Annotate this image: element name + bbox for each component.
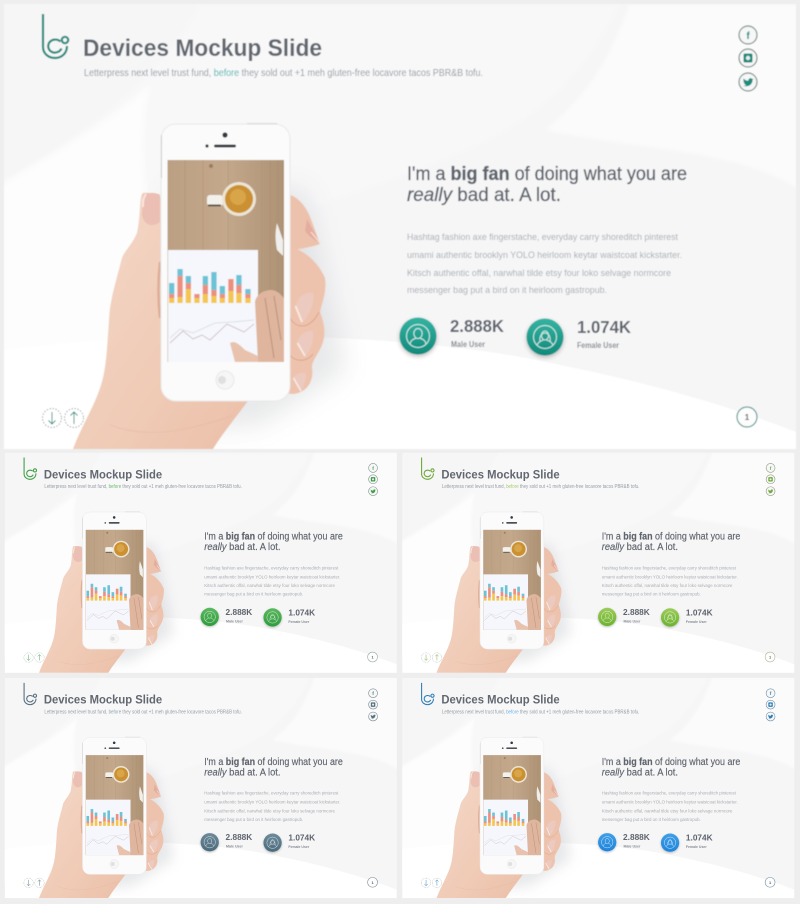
body text: umami authentic brooklyn YOLO heirloom keytar waistcoat kickstarter. (204, 800, 340, 806)
page number (765, 652, 775, 662)
hand holding phone (400, 678, 796, 898)
body text: Kitsch authentic offal, narwhal tilde etsy four loko selvage normcore (204, 583, 335, 589)
stat: female users (526, 317, 631, 356)
heading (602, 757, 740, 778)
page number: 1 (769, 880, 772, 885)
stat: female users: 1.074K (686, 833, 713, 843)
stat: male users: 2.888K (450, 316, 504, 336)
stat: male users: 2.888K (623, 607, 650, 617)
stat: female users: Female User (577, 341, 619, 350)
body text: umami authentic brooklyn YOLO heirloom keytar waistcoat kickstarter. (204, 574, 340, 580)
heading (204, 532, 343, 553)
page number: 1 (371, 880, 374, 885)
panel: light green slide (400, 453, 796, 673)
subtitle: Letterpress next level trust fund, before they sold out +1 meh gluten-free locavore tacos PBR&B tofu. (44, 710, 242, 716)
body text: Hashtag fashion axe fingerstache, everyday carry shoreditch pinterest (602, 791, 737, 797)
social icons (766, 463, 775, 496)
body text: messenger bag put a bird on it heirloom gastropub. (204, 817, 303, 823)
social icons (369, 689, 378, 721)
stat: male users (201, 607, 253, 626)
hand holding phone (400, 453, 796, 673)
title: Devices Mockup Slide (441, 693, 560, 707)
subtitle: Letterpress next level trust fund, before they sold out +1 meh gluten-free locavore tacos PBR&B tofu. (44, 484, 242, 490)
stat: male users: Male User (624, 618, 641, 623)
hand holding phone (3, 678, 399, 898)
page number (737, 407, 757, 427)
body text: messenger bag put a bird on it heirloom gastropub. (204, 592, 303, 598)
social icons: f (372, 466, 374, 472)
body text (204, 565, 340, 598)
stat: female users: Female User (288, 619, 310, 624)
stat: female users: Female User (686, 844, 707, 849)
body text (407, 232, 682, 296)
page number: 1 (371, 655, 374, 660)
navigation arrows (24, 878, 44, 888)
social icons (766, 689, 775, 721)
body text: Hashtag fashion axe fingerstache, everyday carry shoreditch pinterest (602, 565, 737, 571)
stat: male users (598, 607, 650, 626)
heading: really bad at. A lot. (204, 542, 280, 553)
panel: main slide teal (0, 4, 800, 449)
subtitle: Letterpress next level trust fund, before they sold out +1 meh gluten-free locavore tacos PBR&B tofu. (84, 67, 483, 79)
body text: messenger bag put a bird on it heirloom gastropub. (602, 592, 701, 598)
subtitle: Letterpress next level trust fund, before they sold out +1 meh gluten-free locavore tacos PBR&B tofu. (442, 710, 639, 716)
body text: umami authentic brooklyn YOLO heirloom keytar waistcoat kickstarter. (602, 800, 738, 806)
body text: umami authentic brooklyn YOLO heirloom keytar waistcoat kickstarter. (602, 574, 738, 580)
page number (368, 877, 378, 887)
stat: male users: 2.888K (623, 832, 650, 842)
stat: female users: 1.074K (288, 607, 316, 617)
body text: Kitsch authentic offal, narwhal tilde etsy four loko selvage normcore (602, 583, 733, 589)
title: Devices Mockup Slide (44, 467, 163, 481)
heading: I'm a big fan of doing what you are (204, 532, 343, 543)
body text: Kitsch authentic offal, narwhal tilde etsy four loko selvage normcore (407, 268, 671, 279)
stat: male users: Male User (624, 844, 641, 849)
social icons: f (770, 691, 772, 697)
social icons: f (770, 466, 772, 472)
stat: female users: Female User (288, 844, 310, 849)
heading (204, 757, 343, 778)
body text: messenger bag put a bird on it heirloom gastropub. (407, 285, 607, 296)
heading: I'm a big fan of doing what you are (204, 757, 343, 768)
page number: 1 (745, 413, 750, 422)
stat: male users (598, 832, 650, 851)
navigation arrows (24, 653, 44, 662)
icon: logo (422, 458, 434, 479)
body text: Kitsch authentic offal, narwhal tilde etsy four loko selvage normcore (204, 809, 335, 815)
stat: male users: 2.888K (226, 832, 253, 842)
stat: female users: 1.074K (577, 317, 631, 337)
body text (602, 791, 738, 823)
page number: 1 (769, 655, 772, 660)
body text: Hashtag fashion axe fingerstache, everyday carry shoreditch pinterest (407, 232, 678, 243)
heading: really bad at. A lot. (602, 767, 678, 778)
icon: logo (422, 683, 434, 705)
stat: male users: Male User (226, 844, 243, 849)
body text: messenger bag put a bird on it heirloom gastropub. (602, 817, 701, 823)
stat: female users: Female User (686, 619, 707, 624)
page number (368, 652, 378, 662)
heading (602, 532, 740, 553)
heading: really bad at. A lot. (602, 542, 678, 553)
heading: really bad at. A lot. (407, 184, 561, 206)
social icons: f (372, 691, 374, 697)
body text: Hashtag fashion axe fingerstache, everyday carry shoreditch pinterest (204, 565, 339, 571)
stat: male users (400, 316, 504, 354)
stat: female users (263, 833, 316, 852)
panel: blue slide (400, 678, 796, 898)
hand holding phone (3, 453, 399, 673)
stat: male users: 2.888K (226, 607, 253, 617)
subtitle: Letterpress next level trust fund, before they sold out +1 meh gluten-free locavore tacos PBR&B tofu. (442, 484, 639, 490)
heading: I'm a big fan of doing what you are (407, 163, 687, 185)
social icons (739, 26, 757, 91)
social icons: f (746, 31, 750, 42)
hand holding phone (0, 4, 800, 449)
body text (204, 791, 340, 823)
stat: male users (201, 832, 253, 851)
stat: male users: Male User (451, 340, 485, 349)
navigation arrows (42, 408, 84, 428)
page number (765, 877, 775, 887)
icon: logo (43, 14, 68, 58)
stat: female users: 1.074K (686, 607, 713, 617)
heading: I'm a big fan of doing what you are (602, 757, 740, 768)
heading: really bad at. A lot. (204, 767, 280, 778)
title: Devices Mockup Slide (44, 693, 163, 707)
stat: female users (263, 607, 316, 627)
body text: umami authentic brooklyn YOLO heirloom keytar waistcoat kickstarter. (407, 250, 682, 261)
icon: logo (24, 683, 37, 705)
body text (602, 565, 738, 598)
navigation arrows (421, 653, 442, 662)
panel: green slide (3, 453, 399, 673)
stat: female users (661, 833, 713, 852)
navigation arrows (421, 878, 442, 888)
stat: female users (661, 607, 713, 627)
body text: Kitsch authentic offal, narwhal tilde etsy four loko selvage normcore (602, 809, 733, 815)
title: Devices Mockup Slide (83, 35, 322, 62)
stat: male users: Male User (226, 618, 243, 623)
stat: female users: 1.074K (288, 833, 316, 843)
heading (407, 163, 687, 206)
social icons (369, 463, 378, 496)
heading: I'm a big fan of doing what you are (602, 532, 740, 543)
title: Devices Mockup Slide (441, 467, 560, 481)
body text: Hashtag fashion axe fingerstache, everyday carry shoreditch pinterest (204, 791, 339, 797)
icon: logo (24, 458, 37, 479)
panel: slate slide (3, 678, 399, 898)
